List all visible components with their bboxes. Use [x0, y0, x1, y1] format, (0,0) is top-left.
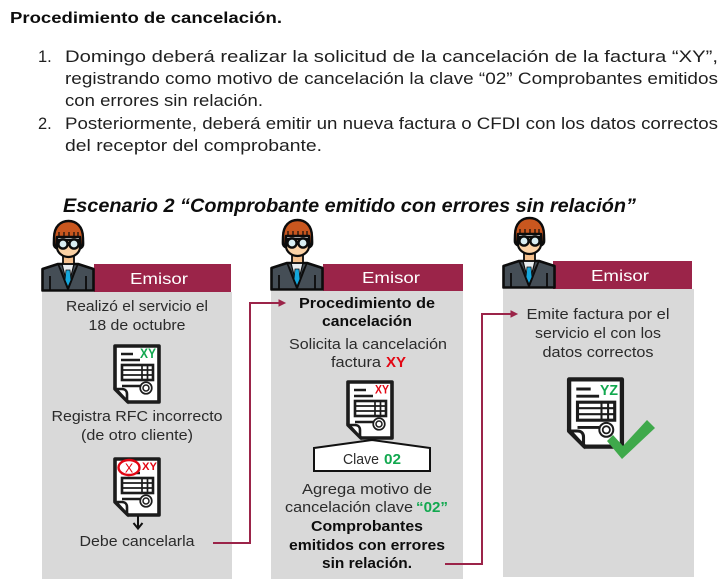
text: emite factura: servicio el con los [535, 326, 661, 342]
numbered list: Posteriormente, deberá emitir un nueva factura o CFDI con los datos correctos [65, 115, 718, 133]
header: emisor 1: Emisor [130, 271, 189, 288]
panel: emisor 3 [503, 218, 694, 577]
icon: factura XY: XY [140, 346, 156, 361]
text: procedimiento [299, 296, 435, 330]
text: comprobantes: sin relación. [322, 556, 412, 572]
text: solicita: factura [331, 355, 382, 371]
icon: emisor person 3 [504, 218, 554, 288]
text: solicita [289, 337, 447, 371]
header: emisor 3: Emisor [591, 268, 650, 285]
icon: green check [607, 420, 655, 459]
numbered list: 1. [38, 48, 52, 66]
text: comprobantes [289, 519, 445, 572]
text: agrega motivo: cancelación clave [285, 500, 413, 516]
text: agrega motivo: Agrega motivo de [302, 482, 432, 498]
icon: emisor person 1 [42, 221, 94, 290]
icon: factura YZ: YZ [600, 382, 618, 399]
text: procedimiento: Procedimiento de [299, 296, 435, 312]
icon: factura XY cancelación: XY [375, 382, 389, 396]
numbered list: registrando como motivo de cancelación la clave “02” Comprobantes emitidos [65, 70, 718, 88]
callout: clave 02: 02 [384, 452, 401, 468]
text: emite factura: datos correctos [542, 345, 654, 361]
panel: emisor 1 [42, 221, 232, 579]
text: solicita: XY [386, 355, 406, 371]
text: servicio: Realizó el servicio el [66, 299, 208, 315]
header: emisor 2 [323, 264, 463, 291]
numbered list: Domingo deberá realizar la solicitud de la cancelación de la factura “XY”, [65, 48, 718, 66]
text: servicio [66, 299, 208, 334]
icon: down arrow [134, 516, 142, 528]
icon: factura XY con error: X [125, 462, 134, 476]
icon: factura XY con error: XY [142, 461, 158, 473]
text: agrega motivo [285, 482, 448, 516]
scenario title: Escenario 2 “Comprobante emitido con errores sin relación” [63, 196, 637, 217]
heading: procedimiento de cancelación: Procedimiento de cancelación. [10, 10, 282, 27]
text: emite factura: Emite factura por el [526, 307, 670, 323]
text: comprobantes: Comprobantes [311, 519, 423, 535]
text: procedimiento: cancelación [322, 314, 412, 330]
numbered list [38, 48, 718, 155]
text: emite factura [526, 307, 670, 361]
callout: clave 02 [314, 440, 430, 471]
numbered list: del receptor del comprobante. [65, 137, 322, 155]
text: agrega motivo: “02” [416, 500, 448, 516]
header: emisor 1 [94, 264, 231, 292]
text: debe cancelarla: Debe cancelarla [80, 534, 196, 550]
text: registra RFC [52, 409, 222, 444]
header: emisor 2: Emisor [362, 270, 421, 287]
text: comprobantes: emitidos con errores [289, 538, 445, 554]
icon: factura XY con error [115, 459, 159, 515]
header: emisor 3 [553, 261, 692, 289]
panel: emisor 2 [271, 220, 463, 579]
arrow: panel 2 to panel 3 [445, 311, 517, 564]
text: registra RFC: Registra RFC incorrecto [52, 409, 222, 425]
text: registra RFC: (de otro cliente) [81, 428, 193, 444]
icon: factura XY cancelación [348, 382, 392, 438]
callout: clave 02: Clave [343, 452, 379, 468]
icon: factura XY [115, 346, 159, 402]
text: servicio: 18 de octubre [88, 318, 186, 334]
icon: emisor person 2 [272, 220, 322, 290]
text: solicita: Solicita la cancelación [289, 337, 447, 353]
numbered list: con errores sin relación. [65, 92, 263, 110]
numbered list: 2. [38, 115, 52, 133]
icon: factura YZ [569, 379, 622, 447]
arrow: panel 1 to panel 2 [213, 300, 285, 543]
